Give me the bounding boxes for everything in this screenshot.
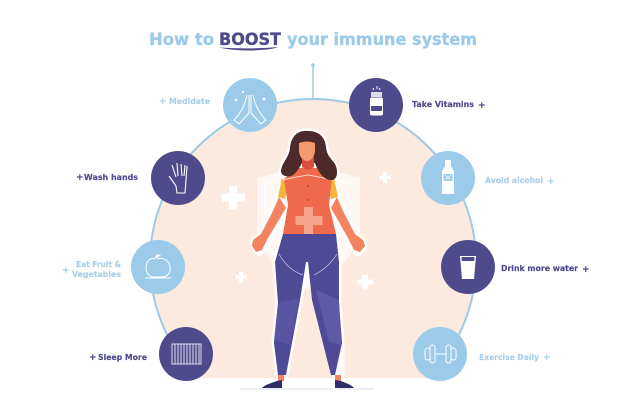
node: Drink more water: +	[582, 265, 590, 275]
icon: dumbbell	[425, 345, 456, 363]
pocket lines	[279, 254, 337, 275]
node: Take Vitamins	[349, 78, 486, 132]
node: Eat Fruit & Vegetables: +	[62, 266, 70, 276]
label: Drink more water	[501, 264, 578, 273]
title: How to	[149, 30, 214, 50]
pants highlight	[316, 290, 341, 345]
node: Medidate: Medidate	[169, 97, 211, 106]
icon: hands	[169, 163, 187, 193]
shield	[257, 168, 360, 290]
label: +	[89, 353, 97, 363]
neck	[302, 157, 314, 170]
node: Sleep More	[89, 327, 213, 381]
background arc panel	[150, 98, 476, 378]
pants	[274, 234, 342, 375]
node: Exercise Daily: +	[543, 353, 551, 363]
node: Exercise Daily	[413, 327, 551, 381]
shoes	[262, 380, 282, 388]
node: Take Vitamins: +	[478, 101, 486, 111]
label: Exercise Daily	[479, 353, 540, 362]
decorative plus signs	[222, 172, 390, 290]
white figure outline	[252, 131, 364, 388]
hair	[281, 131, 337, 180]
icon: glass	[460, 256, 476, 279]
woman figure	[252, 131, 365, 388]
top pin line	[311, 63, 315, 99]
title: your immune system	[287, 30, 477, 50]
ground line	[240, 388, 374, 390]
node: Sleep More: Sleep More	[98, 353, 148, 362]
sleeves	[278, 178, 288, 199]
right arm	[331, 197, 365, 252]
left arm	[252, 197, 286, 252]
node: Medidate	[159, 78, 277, 132]
title: BOOST	[219, 30, 281, 50]
node: Drink more water	[441, 240, 590, 294]
title	[149, 30, 477, 50]
torso shirt	[283, 168, 336, 234]
label: Eat Fruit &	[76, 260, 121, 269]
icon: vitamin bottle	[370, 86, 383, 116]
shirt buttons	[307, 185, 309, 215]
node: Avoid alcohol: +	[547, 177, 555, 187]
face	[299, 142, 315, 161]
immune line	[283, 175, 333, 180]
icon: fruit	[145, 255, 171, 278]
node: Avoid alcohol	[421, 151, 555, 205]
node: Wash hands	[76, 151, 205, 205]
icon: praying hands	[234, 91, 266, 124]
label: +	[159, 97, 167, 107]
node: Eat Fruit & Vegetables: Vegetables	[72, 270, 121, 279]
label: Take Vitamins	[412, 100, 474, 109]
icon: bottle	[442, 160, 454, 194]
label: +	[76, 173, 84, 183]
node: Wash hands: Wash hands	[84, 173, 138, 182]
label: Avoid alcohol	[485, 176, 543, 185]
cross on torso	[296, 207, 322, 234]
icon: bed slats	[172, 344, 201, 364]
node: Eat Fruit & Vegetables	[62, 240, 185, 294]
ankles	[278, 375, 341, 381]
